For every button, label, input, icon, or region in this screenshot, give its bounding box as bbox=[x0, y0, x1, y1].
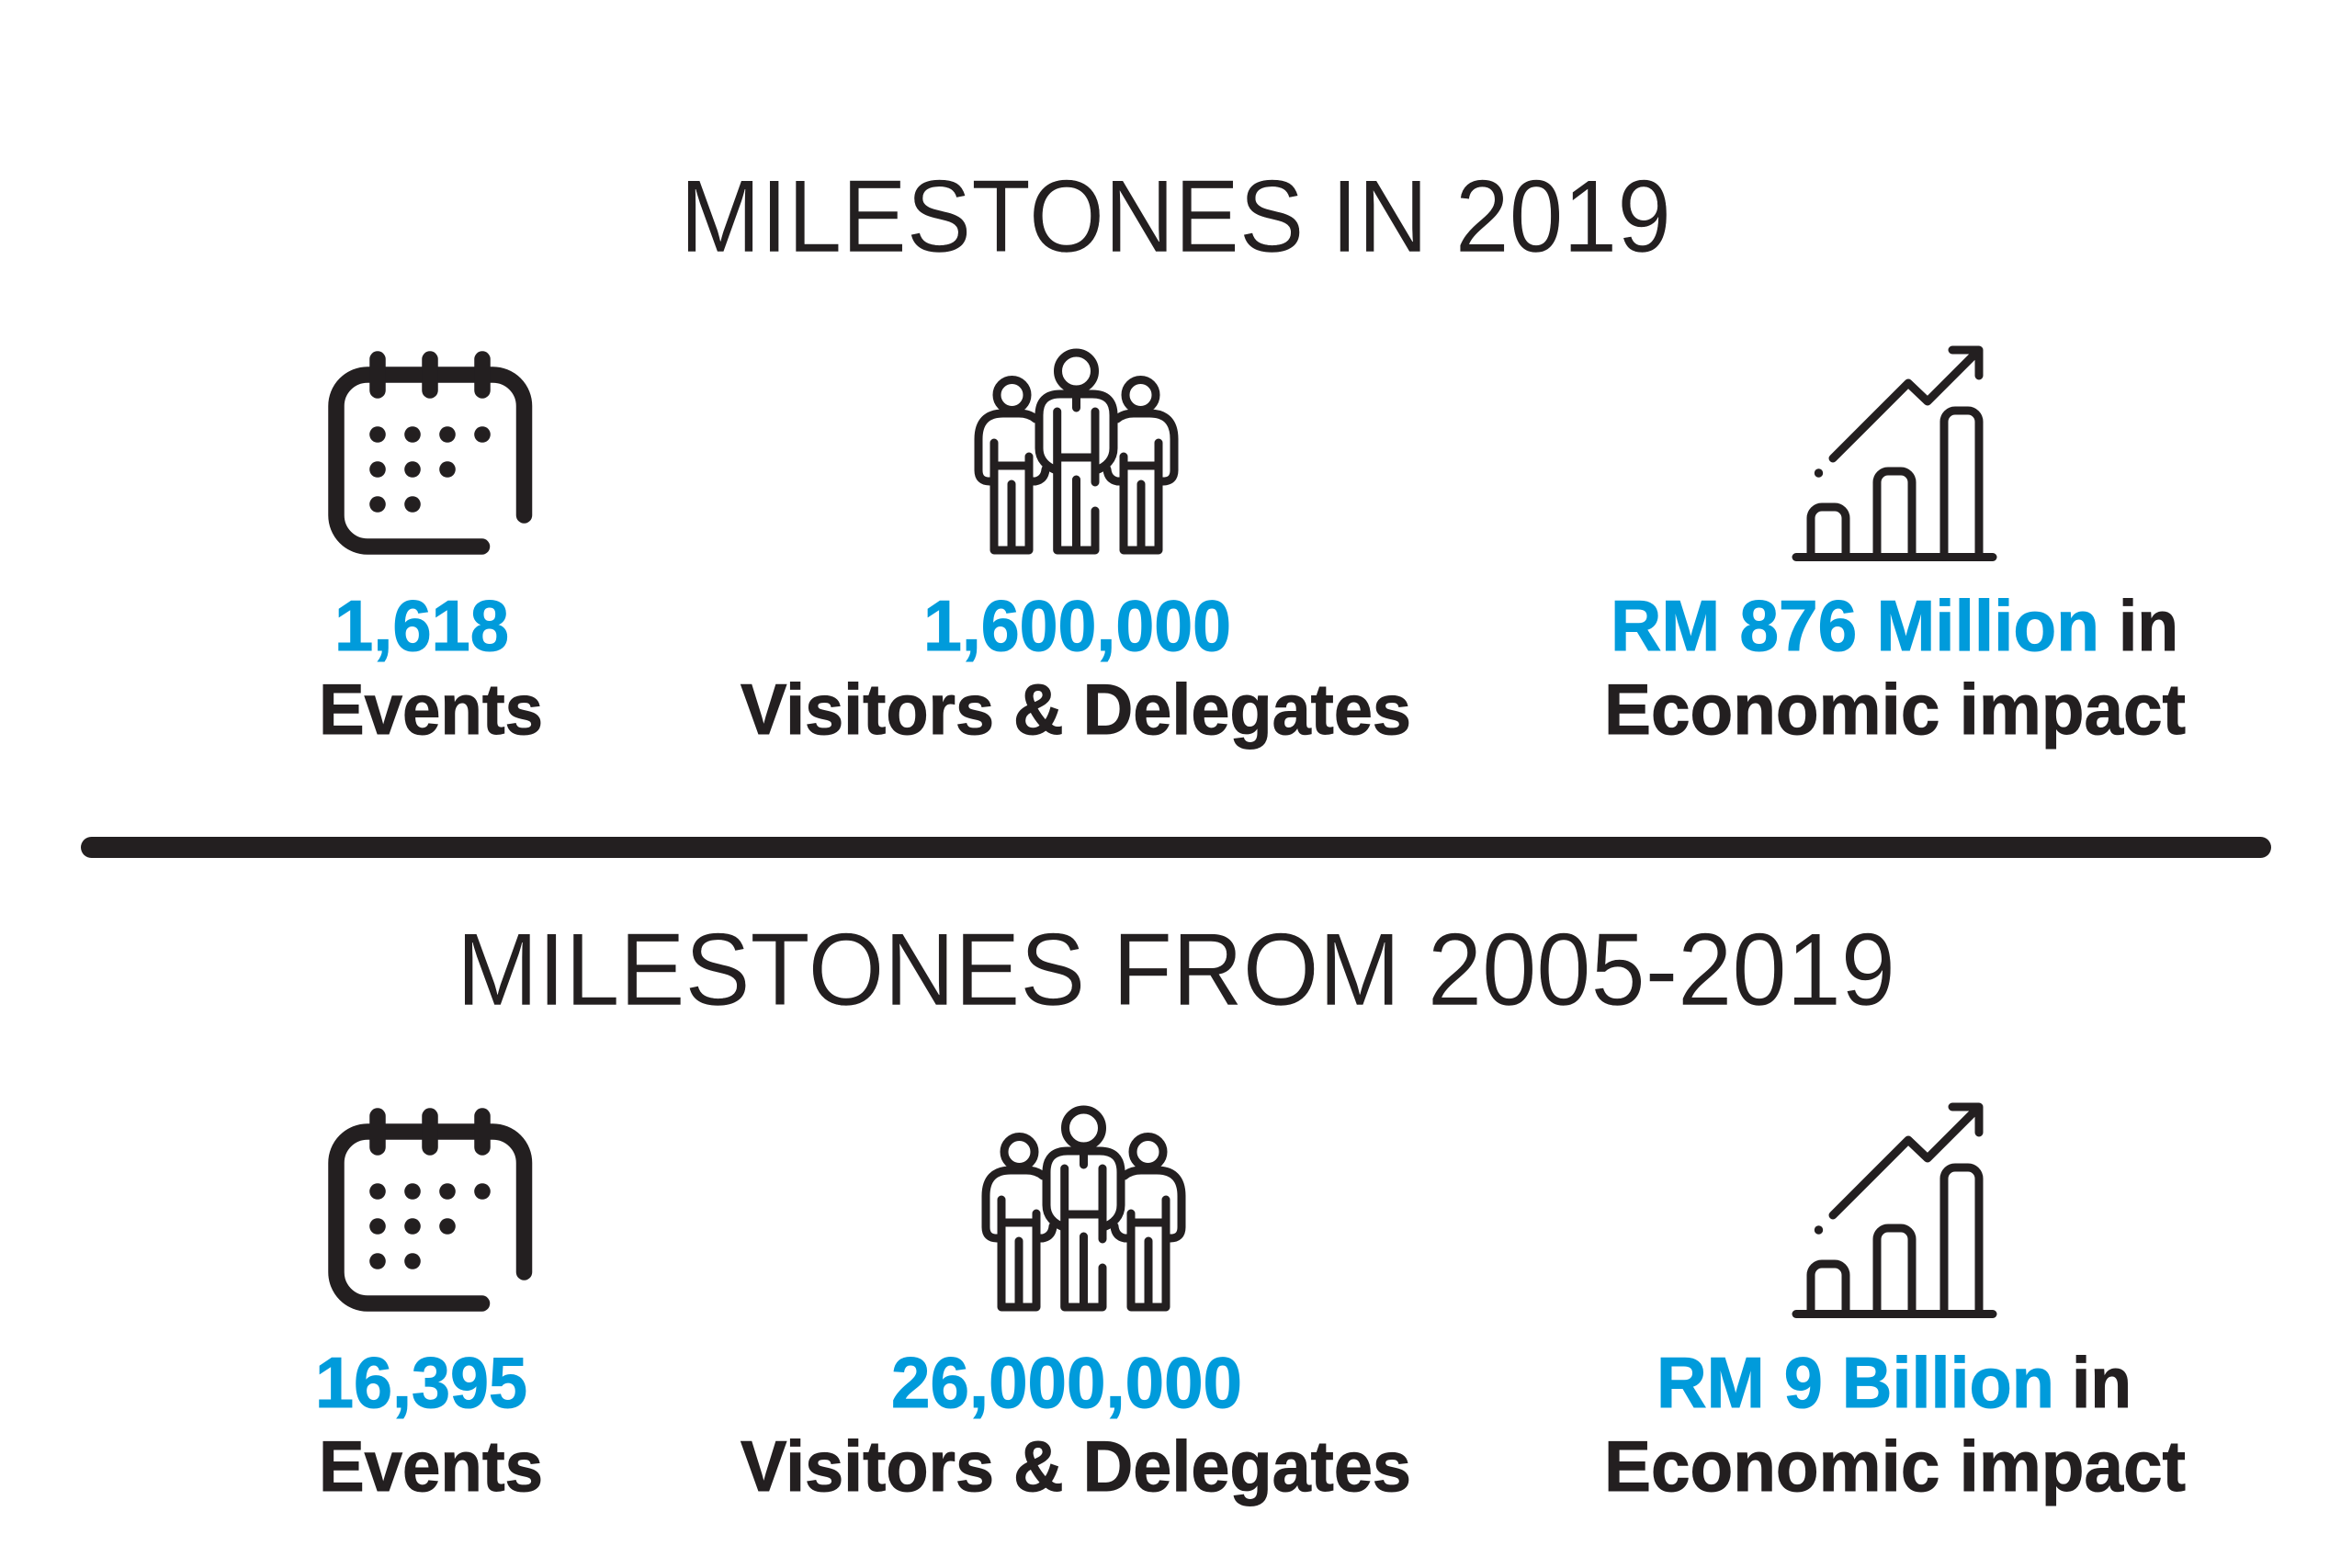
stat: visitors and delegates 2005-2019: 26,000,000 bbox=[891, 1342, 1242, 1423]
stat: economic impact 2005-2019: Economic impact bbox=[1604, 1426, 2186, 1506]
stat: economic impact 2005-2019: RM 9 Billion bbox=[1657, 1342, 2054, 1423]
stat: events 2019: 1,618 bbox=[334, 585, 509, 666]
icon: rising bar chart bbox=[1796, 350, 1993, 557]
stat: events 2005-2019 bbox=[315, 1342, 543, 1506]
panel: milestones from 2005-2019 bbox=[315, 912, 2186, 1506]
stat: visitors and delegates 2019 bbox=[741, 585, 1411, 750]
icon: group of people bbox=[986, 1110, 1182, 1307]
divider bar bbox=[81, 837, 2271, 858]
heading: milestones in 2019: MILESTONES IN 2019 bbox=[680, 159, 1671, 274]
stat: economic impact 2019: RM 876 Million bbox=[1611, 585, 2099, 666]
heading: milestones from 2005-2019: MILESTONES FROM 2005-2019 bbox=[457, 912, 1895, 1027]
stat: events 2019 bbox=[319, 585, 543, 750]
stat: visitors and delegates 2019: Visitors & Delegates bbox=[741, 669, 1411, 750]
stat: events 2005-2019: 16,395 bbox=[315, 1342, 527, 1423]
stat: visitors and delegates 2005-2019: Visitors & Delegates bbox=[741, 1426, 1411, 1506]
stat: visitors and delegates 2005-2019 bbox=[741, 1342, 1411, 1506]
stat: economic impact 2005-2019 bbox=[1604, 1342, 2186, 1506]
icon: calendar bbox=[336, 1116, 524, 1303]
icon: rising bar chart bbox=[1796, 1107, 1993, 1314]
stat: events 2005-2019: Events bbox=[319, 1426, 543, 1506]
stat: economic impact 2019: Economic impact bbox=[1604, 669, 2186, 750]
panel: milestones in 2019 bbox=[319, 159, 2186, 750]
icon: group of people bbox=[978, 353, 1174, 550]
stat: economic impact 2019 bbox=[1604, 585, 2186, 750]
stat: economic impact 2019: in bbox=[2119, 585, 2178, 666]
icon: calendar bbox=[336, 359, 524, 547]
stat: events 2019: Events bbox=[319, 669, 543, 750]
stat: visitors and delegates 2019: 1,600,000 bbox=[923, 585, 1231, 666]
stat: economic impact 2005-2019: in bbox=[2072, 1342, 2132, 1423]
